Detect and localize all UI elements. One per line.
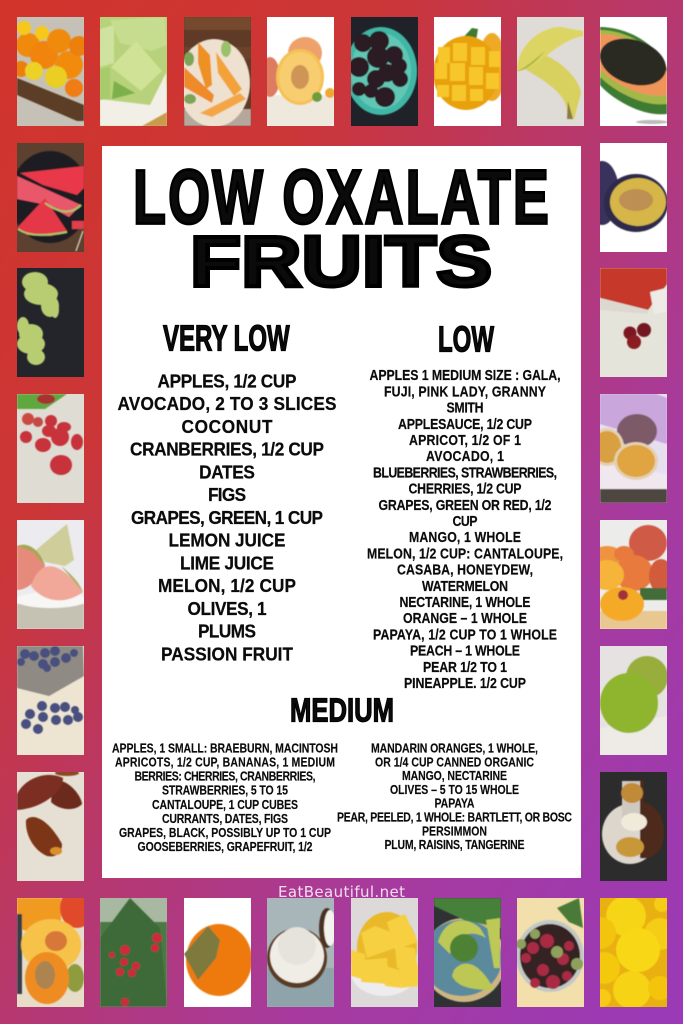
text block: medium list left: APPLES, 1 SMALL: BRAEBURN, MACINTOSH: [112, 743, 338, 756]
heading: low: LOW: [438, 320, 494, 360]
photo: apricots and citrus: [17, 898, 84, 1007]
text block: low list: PAPAYA, 1/2 CUP TO 1 WHOLE: [373, 626, 557, 643]
text block: very low list: LEMON JUICE: [169, 530, 286, 551]
text block: medium list right: PEAR, PEELED, 1 WHOLE: BARTLETT, OR BOSC: [337, 812, 573, 825]
text block: very low list: OLIVES, 1: [187, 598, 267, 619]
text block: very low list: PLUMS: [198, 621, 256, 642]
text block: medium list left: CURRANTS, DATES, FIGS: [162, 813, 288, 826]
text block: low list: PINEAPPLE. 1/2 CUP: [404, 675, 526, 691]
photo: bananas on marble: [517, 17, 584, 126]
photo: figs on plate: [17, 520, 84, 629]
text block: low list: CHERRIES, 1/2 CUP: [409, 481, 522, 497]
footer: site name: EatBeautiful.net: [278, 883, 405, 901]
photo: red gooseberries in bowl: [517, 898, 584, 1007]
photo: mango: [434, 17, 501, 126]
photo: pineapple chunks in bowl: [351, 898, 418, 1007]
text block: medium list left: GRAPES, BLACK, POSSIBLY UP TO 1 CUP: [119, 827, 331, 840]
photo: peaches: [600, 520, 667, 629]
text block: medium list right: PERSIMMON: [422, 826, 487, 839]
photo: peach half: [267, 17, 334, 126]
photo: cantaloupe slices on plate: [184, 17, 251, 126]
heading: medium: MEDIUM: [290, 692, 394, 729]
photo: coconut: [267, 898, 334, 1007]
photo: cranberries on marble: [17, 394, 84, 503]
photo: green grapes on slate: [17, 268, 84, 377]
text block: medium list right: [337, 743, 573, 852]
text block: low list: APPLESAUCE, 1/2 CUP: [398, 416, 532, 432]
text block: low list: MELON, 1/2 CUP: CANTALOUPE,: [367, 545, 563, 562]
text block: very low list: FIGS: [208, 485, 246, 505]
photo: limes: [600, 646, 667, 755]
text block: medium list right: MANGO, NECTARINE: [402, 770, 507, 783]
text block: very low list: [117, 371, 337, 665]
text block: low list: AVOCADO, 1: [426, 448, 504, 464]
text block: medium list right: OLIVES – 5 TO 15 WHOLE: [390, 784, 519, 797]
text block: very low list: LIME JUICE: [180, 553, 274, 574]
text block: very low list: CRANBERRIES, 1/2 CUP: [130, 439, 324, 460]
text block: very low list: AVOCADO, 2 TO 3 SLICES: [117, 394, 337, 414]
text block: low list: FUJI, PINK LADY, GRANNY: [384, 383, 546, 400]
photo: blueberries: [17, 646, 84, 755]
photo: gooseberry bush: [100, 898, 167, 1007]
photo: plum half: [600, 143, 667, 252]
photo: passion fruit: [600, 394, 667, 503]
photo: dates on marble: [17, 772, 84, 881]
text block: low list: NECTARINE, 1 WHOLE: [400, 594, 531, 610]
text block: low list: BLUEBERRIES, STRAWBERRIES,: [373, 464, 557, 481]
title: [133, 155, 549, 302]
text block: low list: WATERMELON: [422, 578, 508, 594]
photo: dried cherries: [600, 268, 667, 377]
photo: avocado and greens: [434, 898, 501, 1007]
text block: medium list left: BERRIES: CHERRIES, CRANBERRIES,: [134, 771, 316, 784]
text block: low list: APPLES 1 MEDIUM SIZE : GALA,: [370, 367, 560, 383]
text block: very low list: PASSION FRUIT: [161, 644, 293, 665]
photo: dried plums in teal bowl: [351, 17, 418, 126]
text block: medium list left: APRICOTS, 1/2 CUP, BANANAS, 1 MEDIUM: [115, 757, 335, 770]
photo: pears on dark plate: [600, 772, 667, 881]
text block: low list: PEAR 1/2 TO 1: [423, 659, 507, 675]
text block: very low list: MELON, 1/2 CUP: [158, 576, 296, 596]
photo: persimmon: [184, 898, 251, 1007]
panel: white text card: [102, 146, 581, 878]
text block: low list: CUP: [453, 513, 478, 529]
text block: medium list left: STRAWBERRIES, 5 TO 15: [162, 785, 289, 798]
text block: medium list left: [112, 743, 338, 854]
photo: oranges in basket: [17, 17, 84, 126]
text block: medium list right: OR 1/4 CUP CANNED ORGANIC: [375, 757, 535, 770]
text block: medium list right: PAPAYA: [435, 798, 475, 811]
text block: very low list: GRAPES, GREEN, 1 CUP: [131, 507, 323, 528]
photo: honeydew melon in bowl: [100, 17, 167, 126]
text block: medium list left: CANTALOUPE, 1 CUP CUBES: [152, 799, 298, 812]
text block: very low list: APPLES, 1/2 CUP: [157, 371, 297, 392]
text block: low list: GRAPES, GREEN OR RED, 1/2: [379, 497, 551, 513]
text block: low list: PEACH – 1 WHOLE: [410, 643, 520, 659]
photo: watermelon slices: [17, 143, 84, 252]
text block: medium list right: MANDARIN ORANGES, 1 WHOLE,: [371, 743, 538, 756]
title: LOW OXALATE: [133, 155, 549, 241]
text block: very low list: DATES: [199, 462, 255, 483]
text block: low list: CASABA, HONEYDEW,: [397, 562, 533, 578]
heading: very low: VERY LOW: [163, 319, 290, 359]
text block: medium list left: GOOSEBERRIES, GRAPEFRUIT, 1/2: [138, 841, 312, 854]
text block: low list: MANGO, 1 WHOLE: [409, 529, 521, 545]
text block: low list: APRICOT, 1/2 OF 1: [409, 432, 521, 448]
text block: medium list right: PLUM, RAISINS, TANGERINE: [384, 839, 525, 852]
photo: papaya half: [600, 17, 667, 126]
text block: low list: [367, 367, 563, 691]
text block: very low list: COCONUT: [182, 416, 273, 437]
title: FRUITS: [190, 223, 492, 302]
text block: low list: SMITH: [447, 400, 483, 416]
photo: yellow plums: [600, 898, 667, 1007]
text block: low list: ORANGE – 1 WHOLE: [403, 610, 527, 626]
